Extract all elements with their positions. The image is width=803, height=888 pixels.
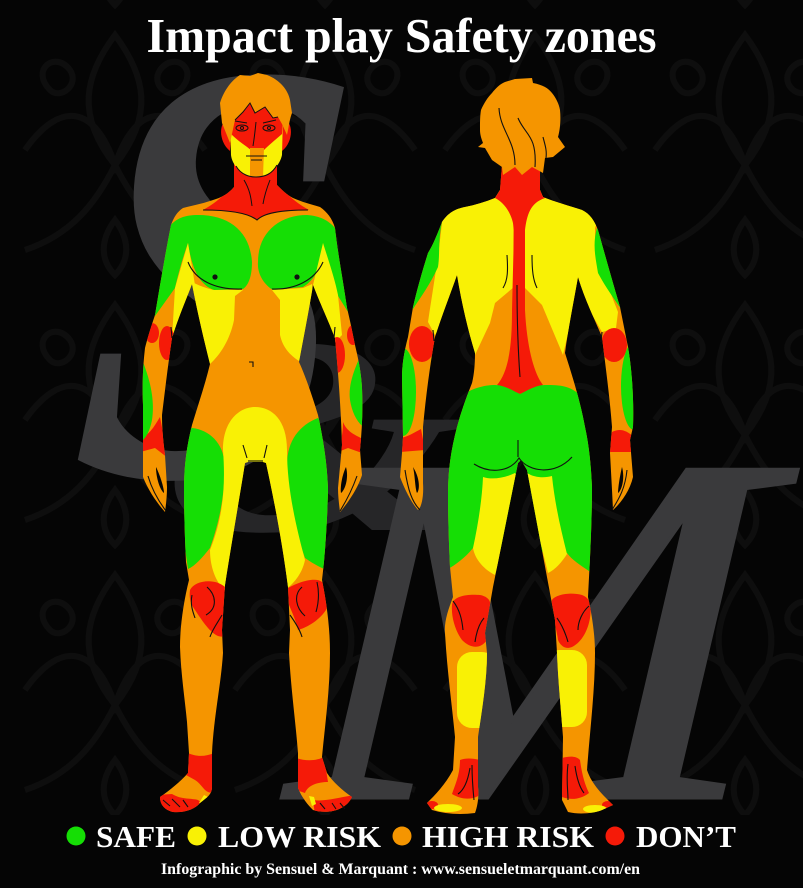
head: front bbox=[220, 73, 292, 206]
legend bbox=[66, 819, 736, 854]
credit line: Infographic by Sensuel & Marquant : www.sensueletmarquant.com/en bbox=[161, 861, 640, 878]
hand gaps: front bbox=[156, 467, 347, 493]
zone: upper arm safe bbox=[412, 222, 442, 309]
title: Impact play Safety zones bbox=[146, 8, 656, 63]
zone: elbows bbox=[409, 326, 435, 362]
zone: forearms safe bbox=[402, 348, 416, 436]
zone: right chest and upper arm bbox=[258, 215, 355, 312]
zone: knees bbox=[190, 581, 225, 637]
zone: low risk flanks and inner arms bbox=[172, 243, 342, 364]
zone: thighs safe bbox=[184, 428, 224, 569]
body zones: front bbox=[142, 164, 362, 812]
zone: forearms safe bbox=[142, 364, 153, 440]
hair: back bbox=[478, 78, 565, 175]
watermark letters S & M: & bbox=[165, 280, 470, 591]
zone: neck and upper chest (do not strike) bbox=[203, 160, 309, 220]
zone: buttocks and thighs safe bbox=[448, 385, 592, 572]
zone: ankles and heels bbox=[452, 758, 480, 799]
zone: left chest and upper arm bbox=[154, 215, 252, 316]
legend item: high risk: HIGH RISK bbox=[422, 819, 594, 854]
legend item: low risk: LOW RISK bbox=[218, 819, 381, 854]
zone: calves bbox=[457, 652, 487, 728]
zone: knees bbox=[452, 595, 490, 647]
zone: back and arms low risk bbox=[428, 190, 514, 355]
front body lines bbox=[148, 210, 357, 809]
body zones: back bbox=[400, 166, 634, 814]
figure: back view bbox=[400, 78, 634, 814]
face lines bbox=[235, 103, 278, 206]
legend item: don't: DON’T bbox=[636, 819, 736, 854]
zone: groin and inner thighs bbox=[210, 407, 305, 590]
zone: wrists bbox=[402, 429, 423, 452]
nipples bbox=[212, 274, 218, 280]
zone: inner thighs bbox=[473, 473, 520, 575]
hand gaps: back bbox=[413, 467, 623, 493]
zone: ankles and toes bbox=[160, 754, 352, 812]
zone: arm joints bbox=[140, 323, 365, 458]
figure: front view bbox=[142, 73, 362, 812]
back body lines bbox=[405, 108, 627, 800]
legend item: safe: SAFE bbox=[96, 819, 176, 854]
zone: spine and neck bbox=[495, 165, 545, 394]
